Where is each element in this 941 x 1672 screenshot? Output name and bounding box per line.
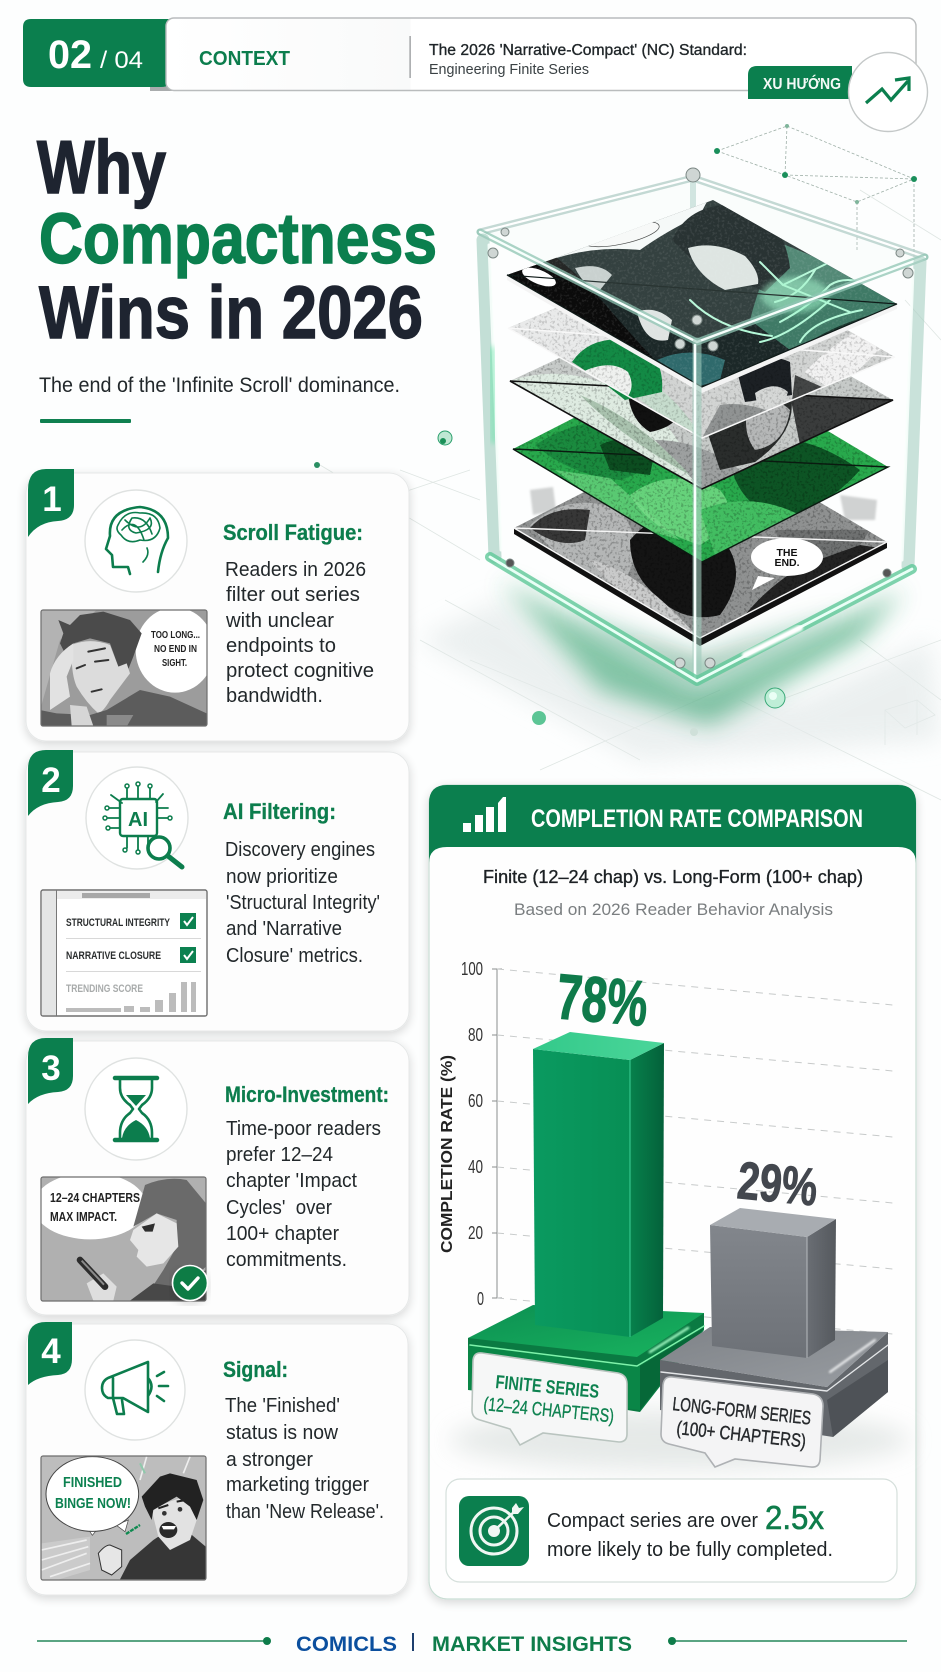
panel: 3 micro-investment	[26, 1038, 409, 1315]
body text 3: prefer 12–24	[226, 1143, 333, 1166]
callout: 2.5x	[446, 1479, 897, 1582]
body text 1: Readers in 2026	[225, 558, 366, 581]
panel: 4 signal	[26, 1322, 408, 1595]
icon: AI chip with magnifier	[86, 767, 188, 869]
header descriptor: Engineering Finite Series	[429, 61, 589, 78]
body text 3: Time-poor readers	[226, 1117, 381, 1140]
number badge 2: 2	[41, 761, 61, 800]
body text 4: marketing trigger	[226, 1473, 369, 1496]
body text 1: endpoints to	[226, 634, 336, 657]
y axis: 0	[477, 1289, 484, 1309]
header white panel	[166, 18, 916, 90]
body text 4	[225, 1394, 384, 1523]
green base	[468, 1305, 704, 1412]
label: finite series	[472, 1353, 627, 1445]
manga layer 4: green page	[512, 418, 890, 562]
heading 2: AI Filtering:	[223, 799, 336, 824]
body text 2	[225, 838, 380, 967]
panel: 1 scroll fatigue	[26, 469, 409, 741]
header tag: xu huong	[748, 52, 928, 132]
panel: completion rate comparison	[429, 785, 916, 1599]
heading 4: Signal:	[223, 1357, 288, 1382]
title: Why	[37, 125, 166, 209]
icon: megaphone	[85, 1340, 185, 1440]
cube floor shadow	[420, 580, 940, 760]
number badge 3: 3	[41, 1049, 61, 1088]
body text 1: protect cognitive	[226, 659, 374, 682]
floating ink fragments	[530, 487, 877, 520]
title: Wins in 2026	[39, 271, 423, 354]
y axis: 80	[468, 1025, 483, 1045]
body text 2: and 'Narrative	[226, 917, 342, 940]
comic panel: phone reader	[33, 1173, 206, 1301]
grey base	[660, 1327, 888, 1437]
chart	[439, 959, 910, 1470]
comic text 1: SIGHT.	[162, 657, 187, 669]
panel: 2 AI filtering	[26, 750, 409, 1031]
y axis: 20	[468, 1223, 483, 1243]
title	[37, 125, 437, 354]
header descriptor: The 2026 'Narrative-Compact' (NC) Standard:	[429, 42, 747, 59]
body text 2: Discovery engines	[225, 838, 375, 861]
check badge	[172, 1266, 208, 1300]
y axis: 60	[468, 1091, 483, 1111]
label: long-form series: (100+ CHAPTERS)	[675, 1418, 807, 1453]
comic panel: finished binge now	[41, 1456, 206, 1580]
comic text 4	[55, 1474, 131, 1512]
THE END speech bubble: THE	[776, 547, 798, 559]
body text 3: commitments.	[226, 1248, 347, 1271]
floor shadow	[450, 1410, 910, 1470]
body text 3: 100+ chapter	[226, 1222, 339, 1245]
THE END speech bubble	[751, 538, 823, 590]
back glass edges	[690, 178, 696, 290]
number badge 2	[28, 750, 73, 816]
y axis: 40	[468, 1157, 483, 1177]
THE END speech bubble: END.	[774, 557, 800, 569]
heading 3: Micro-Investment:	[225, 1082, 389, 1107]
callout text: 2.5x	[765, 1499, 824, 1536]
header divider	[410, 36, 411, 78]
icon: rising bars	[463, 797, 506, 832]
comic frame 4	[41, 1456, 206, 1580]
icon: rising trend arrow	[848, 52, 928, 132]
glass bolts	[488, 168, 913, 668]
value 29%: 29%	[735, 1151, 820, 1218]
body text 2: Closure' metrics.	[226, 944, 363, 967]
manga layer 2	[510, 308, 894, 439]
callout text: more likely to be fully completed.	[547, 1539, 833, 1561]
body text 1: with unclear	[225, 609, 334, 632]
comic panel: discovery dashboard: STRUCTURAL INTEGRITY	[66, 917, 171, 929]
brand: COMICLS	[296, 1633, 397, 1656]
number badge 1: 1	[42, 480, 62, 519]
chart header	[429, 785, 916, 863]
body text 4: a stronger	[226, 1448, 313, 1471]
green spheres	[314, 431, 785, 736]
section number tab	[23, 19, 172, 87]
body text 1: bandwidth.	[226, 684, 323, 707]
body text 1	[225, 558, 374, 707]
y axis	[461, 959, 893, 1334]
comic text 3: 12–24 CHAPTERS	[50, 1191, 140, 1205]
comic text 1	[151, 629, 200, 669]
body text 3: chapter 'Impact	[226, 1169, 357, 1192]
callout text	[547, 1499, 833, 1561]
section number tab: 02	[48, 33, 92, 77]
bar: long-form series	[710, 1208, 836, 1358]
body text 2: 'Structural Integrity'	[226, 891, 380, 914]
check 1	[180, 913, 196, 929]
comic panel: discovery dashboard: TRENDING SCORE	[66, 983, 143, 995]
trending mini bars	[66, 982, 196, 1012]
manga layer 3	[510, 358, 894, 490]
comic panel: too long	[40, 607, 214, 727]
comic text 3: MAX IMPACT.	[50, 1210, 117, 1224]
comic frame 1	[41, 610, 207, 726]
subtitle: The end of the 'Infinite Scroll' dominance.	[39, 374, 400, 397]
comic text 4: FINISHED	[63, 1474, 122, 1491]
body text 4: than 'New Release'.	[226, 1500, 384, 1523]
body text 1: filter out series	[226, 583, 360, 606]
body text 3	[226, 1117, 381, 1271]
chart header: COMPLETION RATE COMPARISON	[531, 805, 863, 833]
comic text 1: TOO LONG...	[151, 629, 200, 641]
label: finite series: FINITE SERIES	[495, 1372, 600, 1403]
comic frame 3	[41, 1177, 206, 1301]
body text 2: now prioritize	[226, 865, 338, 888]
label: long-form series	[661, 1377, 823, 1467]
chart source note: Based on 2026 Reader Behavior Analysis	[514, 900, 833, 919]
callout text: Compact series are over	[547, 1510, 758, 1532]
body text 4: status is now	[226, 1421, 338, 1444]
y axis: 100	[461, 959, 483, 979]
icon: head with tangled brain	[85, 490, 187, 592]
check 2	[180, 947, 196, 963]
number badge 4	[28, 1322, 72, 1385]
manga layer 1: hero with green lightning	[505, 190, 900, 393]
icon: hourglass	[85, 1058, 187, 1160]
title: Compactness	[39, 200, 437, 279]
body text 4: The 'Finished'	[225, 1394, 340, 1417]
comic text 3	[50, 1191, 140, 1224]
manga layer 5	[514, 492, 888, 646]
icon: AI chip with magnifier: AI	[128, 809, 148, 831]
comic panel: discovery dashboard: NARRATIVE CLOSURE	[66, 950, 161, 962]
number badge 1	[28, 469, 74, 537]
glass cube frame	[478, 168, 925, 681]
header bar	[23, 18, 916, 91]
comic text 1: NO END IN	[154, 643, 197, 655]
number badge 3	[28, 1038, 73, 1104]
bar: finite series	[533, 1032, 664, 1337]
icon: target with arrow	[459, 1496, 529, 1566]
label: long-form series: LONG-FORM SERIES	[671, 1394, 812, 1430]
heading 1: Scroll Fatigue:	[223, 520, 363, 545]
footer	[37, 1633, 907, 1656]
footer label: MARKET INSIGHTS	[432, 1633, 632, 1656]
title rule	[40, 419, 131, 423]
hero: acrylic cube of manga layers	[314, 168, 940, 760]
header descriptor	[429, 42, 747, 78]
header tag: xu huong: XU HƯỚNG	[763, 75, 841, 93]
comic text 4: BINGE NOW!	[55, 1495, 131, 1512]
y axis title: COMPLETION RATE (%)	[439, 1055, 456, 1253]
section number tab: / 04	[100, 47, 143, 74]
label: finite series: (12–24 CHAPTERS)	[483, 1394, 615, 1428]
body text 3: Cycles' over	[226, 1196, 332, 1219]
context label: CONTEXT	[199, 48, 290, 70]
background network lines	[320, 124, 941, 800]
comic panel: discovery dashboard	[41, 890, 207, 1016]
chart subtitle: Finite (12–24 chap) vs. Long-Form (100+ chap)	[483, 867, 863, 887]
number badge 4: 4	[41, 1332, 61, 1371]
value 78%: 78%	[554, 960, 651, 1040]
